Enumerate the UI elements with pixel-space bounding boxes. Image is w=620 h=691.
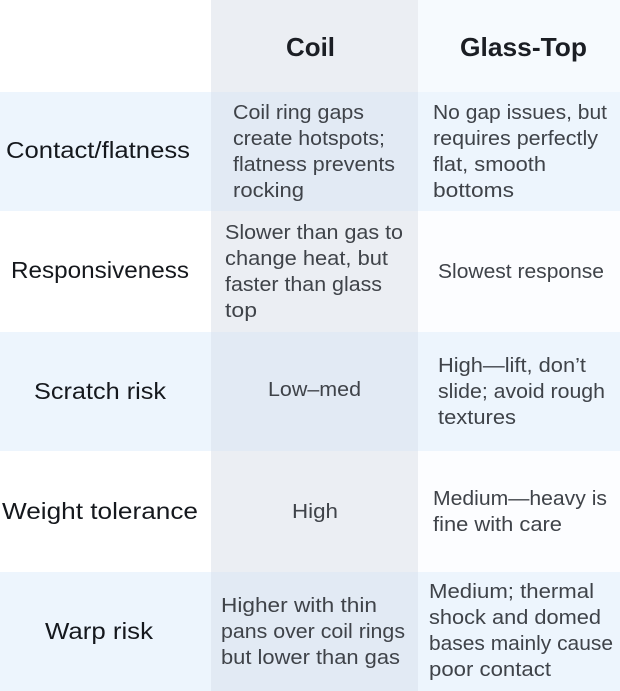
row: scratch risk <box>34 355 605 429</box>
glass-top cell: flat, smooth <box>433 154 546 176</box>
row: warp risk <box>45 581 613 681</box>
row label: Contact/flatness <box>6 137 190 163</box>
glass-top cell <box>433 488 607 536</box>
glass-top cell: textures <box>438 407 516 429</box>
coil cell: but lower than gas <box>221 647 400 669</box>
coil cell: create hotspots; <box>233 128 385 150</box>
coil cell: faster than glass <box>225 274 382 296</box>
row label: Scratch risk <box>34 378 167 404</box>
coil cell: High <box>292 501 338 523</box>
coil cell: rocking <box>233 180 304 202</box>
glass-top cell: No gap issues, but <box>433 102 607 124</box>
coil cell: Coil ring gaps <box>233 102 364 124</box>
row: contact/flatness <box>6 102 607 202</box>
glass-top cell <box>433 102 607 202</box>
glass-top cell: High—lift, don’t <box>438 355 586 377</box>
glass-top cell: bottoms <box>433 180 514 202</box>
coil cell: Higher with thin <box>221 595 377 617</box>
row label: Responsiveness <box>11 257 189 283</box>
glass-top cell: poor contact <box>429 659 551 681</box>
row: responsiveness <box>11 222 604 322</box>
glass-top cell: shock and domed <box>429 607 601 629</box>
glass-top cell: slide; avoid rough <box>438 381 605 403</box>
glass-top cell: Medium—heavy is <box>433 488 607 510</box>
glass-top cell: Slowest response <box>438 261 604 283</box>
coil cell: flatness prevents <box>233 154 395 176</box>
glass-top cell: fine with care <box>433 514 562 536</box>
coil cell <box>225 222 403 322</box>
row: weight tolerance <box>2 488 607 536</box>
column heading: Glass-Top: Glass-Top <box>460 32 587 62</box>
coil cell <box>233 102 395 202</box>
coil cell: Slower than gas to <box>225 222 403 244</box>
column heading: Coil: Coil <box>286 32 335 62</box>
coil cell: change heat, but <box>225 248 388 270</box>
glass-top cell <box>429 581 613 681</box>
glass-top cell: Medium; thermal <box>429 581 594 603</box>
row label: Warp risk <box>45 618 154 644</box>
coil cell: top <box>225 300 257 322</box>
row label: Weight tolerance <box>2 498 198 524</box>
coil cell: pans over coil rings <box>221 621 405 643</box>
glass-top cell <box>438 355 605 429</box>
glass-top cell: bases mainly cause <box>429 633 613 655</box>
coil cell <box>221 595 405 669</box>
glass-top cell: requires perfectly <box>433 128 598 150</box>
coil cell: Low–med <box>268 379 361 401</box>
